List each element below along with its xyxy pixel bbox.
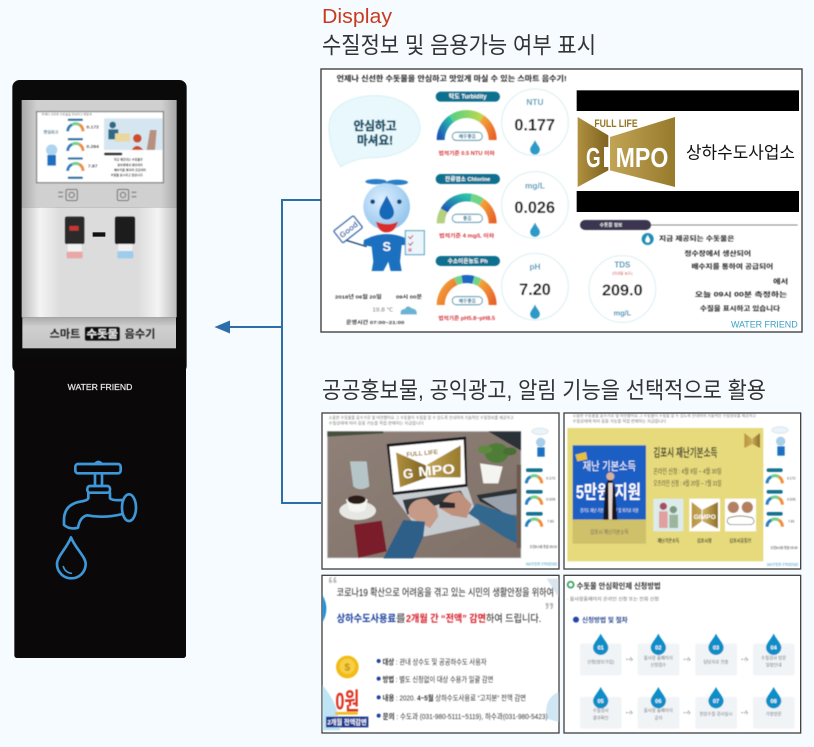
speech bubble (329, 96, 420, 167)
zero won: 0원 (335, 688, 359, 715)
tile: family (653, 499, 683, 531)
tile labels: 김포시유튜브 (729, 537, 752, 544)
step 06: 06 (655, 699, 661, 705)
section title (573, 615, 628, 624)
heading: Display: Display (322, 6, 392, 28)
notice headline: 를 (396, 613, 406, 625)
step 06: 물사랑 홈페이지 (644, 707, 673, 714)
tile: logo (689, 499, 720, 531)
water info: 오늘 09시 00분 측정하는 (695, 290, 787, 299)
TDS value: TDS (614, 261, 631, 270)
dispenser lower cabinet (14, 358, 186, 658)
redaction band top (577, 90, 799, 111)
chlorine indicator: 잔류염소 Chlorine (445, 175, 490, 183)
tile labels: 재난기본소득 (657, 537, 680, 544)
video poster: 재난 기본소득 (583, 460, 636, 473)
tile labels: 김포시청 (697, 537, 712, 544)
TDS value: 209.0 (602, 283, 643, 300)
panel: main display (321, 69, 802, 332)
speech bubble: 마셔요! (357, 133, 393, 147)
caption lines: 소중한 수돗물을 음수기로 옆 마련했어요 그 수돗물이 수질을 알 수 있도록 안내하여 기술적인 수질정보를 제공하고 (573, 412, 756, 418)
step 01: 신청(정보가입) (587, 658, 615, 665)
turbidity indicator: 탁도 Turbidity (449, 93, 487, 101)
date and time: 운영시간 07:00~21:00 (346, 319, 405, 326)
water info: 에서 (773, 276, 788, 285)
chlorine value: 0.026 (514, 198, 555, 217)
NTU value: NTU (526, 97, 544, 107)
tap divider (93, 232, 105, 237)
laptop photo (327, 431, 521, 558)
step 02: 물사랑 홈페이지 (644, 654, 673, 661)
intro line: · 물사랑홈페이지 온라인 신청 또는 전화 신청 (567, 596, 659, 603)
heading: selective use: 공공홍보물, 공익광고, 알림 기능을 선택적으로 활용 (322, 377, 766, 403)
label bar (22, 317, 176, 348)
step 04: 04 (771, 646, 778, 652)
step 08 (753, 687, 795, 729)
panel: water fee reduction notice (322, 572, 559, 733)
NTU value (502, 89, 568, 156)
mascot: Good (338, 220, 360, 240)
silver screen panel (22, 100, 177, 207)
notice headline: 코로나19 확산으로 어려움을 겪고 있는 시민의 생활안정을 위하여 (337, 586, 554, 599)
touch screen: 지금 제공되는 수돗물은 (114, 157, 143, 162)
step 05: 결과확인 (593, 714, 609, 721)
sidebar: 7.81 (547, 520, 554, 524)
panel: promotional laptop screen: 수질상태에 따라 음용 가능을 직접 판매하는 지금합니다 (329, 420, 424, 426)
dispensing bay (22, 207, 177, 317)
hot water tap (65, 217, 84, 258)
step 05: 수질검사 (593, 707, 609, 714)
notice headline: 상하수도사용료 (337, 612, 396, 625)
detail list: 문의 : 수도과 (031-980-5111~5119), 하수과(031-980-5423) (383, 711, 548, 721)
notice headline: “ (327, 572, 338, 596)
step 05 (580, 687, 622, 729)
detail list: 방법 : 별도 신청없이 대상 수용가 일괄 감면 (383, 674, 493, 684)
step 06 (638, 687, 679, 729)
label text (50, 326, 155, 341)
panel: promotional laptop screen (322, 413, 559, 569)
video poster: 5만원 지원 (576, 482, 641, 503)
touch screen: 7.87 (88, 163, 98, 169)
speech bubble: 안심하고 (354, 120, 397, 133)
turbidity indicator (436, 92, 500, 157)
turbidity indicator: 매우좋음 (459, 133, 477, 140)
water info: 지금 제공되는 수돗물은 (659, 234, 735, 243)
right half of display (577, 90, 799, 330)
icon: cloud (401, 306, 417, 314)
sidebar (526, 428, 558, 568)
water info: 배수지를 통하여 공급되어 (691, 261, 773, 270)
two month badge (326, 717, 368, 727)
pH value: pH (529, 262, 541, 272)
label text: 스마트 (50, 327, 80, 340)
touch screen: 언제나 신선한 수돗물을 안심하고 맛있게 (42, 112, 92, 116)
video poster: 경기도 재난 기본소득 10만 및 위기로 지원 (580, 507, 639, 514)
label text: 수돗물 (87, 328, 118, 340)
touch screen: 수질을 표시하고 있습니다 (111, 172, 143, 177)
GIMPO logo: G (586, 142, 601, 173)
step 01 (580, 634, 622, 675)
laptop photo: FULL LIFE (406, 449, 438, 459)
step 02: 02 (655, 646, 661, 652)
brand mark: WATER FRIEND (731, 320, 798, 330)
two month badge: 2개월 전액감면 (327, 717, 367, 726)
notice headline (327, 572, 555, 625)
pH indicator: 법적기준 pH5.8~pH8.5 (438, 314, 495, 322)
panel: water quality check procedure (564, 575, 801, 733)
chlorine indicator (436, 174, 500, 239)
chlorine value: mg/L (525, 180, 545, 190)
date and time: 09시 00분 (396, 293, 422, 300)
TDS value (589, 256, 656, 322)
caption lines: 소중한 수돗물을 음수기로 옆 마련했어요 그 수돗물이 수질을 알 수 있도록 안내하여 기술적인 수질정보를 제공하고 (329, 414, 514, 420)
water info (580, 220, 798, 313)
pH indicator: 수소이온농도 Ph (448, 257, 488, 265)
icon: gold coin (336, 656, 359, 678)
notice text: 김포시 재난기본소득 (653, 445, 717, 459)
touch screen (37, 112, 163, 183)
notice text: 온라인 신청 : 4월 9일 ~ 4월 30일 (653, 467, 722, 476)
redaction band bottom (577, 191, 799, 212)
GIMPO logo: MPO (616, 142, 668, 173)
label text: 음수기 (125, 326, 155, 340)
sidebar: 7.81 (788, 520, 795, 524)
step 01: 01 (598, 646, 604, 652)
touch screen: 안심하고 (44, 128, 59, 134)
mascot (334, 179, 424, 271)
dispenser upper body (12, 80, 187, 373)
org name: 상하수도사업소 (686, 142, 795, 162)
chlorine indicator: 좋음 (463, 216, 472, 222)
notice text (653, 445, 722, 487)
step 07 (695, 687, 737, 729)
GIMPO logo: FULL LIFE (594, 118, 638, 130)
pH value (502, 253, 568, 320)
small logo (744, 433, 760, 448)
yellow notice board (567, 428, 763, 561)
step 04: 일정안내 (766, 661, 782, 668)
chlorine value (502, 172, 568, 238)
chlorine indicator: 법적기준 4 mg/L 이하 (439, 231, 494, 239)
touch screen: 배수지를 통하여 공급되어 (114, 167, 146, 172)
step 04: 수질검사 방문 (761, 654, 786, 661)
sidebar: 0.026 (546, 498, 555, 502)
sidebar (767, 427, 799, 568)
display headline: 언제나 신선한 수돗물을 안심하고 맛있게 마실 수 있는 스마트 음수기! (337, 74, 567, 83)
panel: disaster basic income notice (564, 412, 801, 569)
notice headline: 하여 드립니다. (486, 612, 541, 625)
video poster: 김포시 재난기본소득 (590, 528, 628, 536)
decorative blue corners (323, 595, 326, 622)
tile: mascots (725, 499, 756, 531)
icon: gold coin: $ (345, 662, 351, 673)
brand text: WATER FRIEND (68, 382, 132, 392)
step 08: 08 (771, 699, 777, 705)
touch screen: 0.172 (86, 125, 99, 131)
laptop photo: G (402, 466, 414, 482)
screen buttons (58, 189, 136, 201)
pH indicator: 매우좋음 (459, 297, 477, 304)
water info: 수질을 표시하고 있습니다 (700, 304, 780, 313)
step 03: 03 (713, 646, 719, 652)
sidebar: 오전8시에 측정 05:00 (770, 545, 798, 550)
step 08: 가정방문 (766, 711, 782, 718)
section title: 신청방법 및 절차 (582, 615, 628, 624)
tile labels (657, 537, 752, 544)
step 02 (638, 634, 679, 675)
sidebar: 0.172 (787, 476, 796, 480)
step 03: 담당자로 전송 (703, 658, 729, 665)
water dispenser (12, 80, 187, 658)
notice headline: ” (544, 598, 555, 622)
procedure title: 수돗물 안심확인제 신청방법 (577, 581, 661, 590)
turbidity indicator: 법적기준 0.5 NTU 이하 (439, 149, 495, 157)
step 02: 신청접수 (650, 661, 666, 668)
notice text: 오프라인 신청 : 4월 20일 ~ 7월 31일 (653, 478, 722, 487)
water info: 정수장에서 생산되어 (684, 248, 751, 257)
mascot: S (382, 240, 391, 254)
tile: logo: GIMPO (694, 514, 716, 521)
notice headline: 2개월 간 “전액” 감면 (406, 612, 486, 625)
NTU value: 0.177 (514, 116, 555, 135)
step 07: 07 (713, 699, 719, 705)
connector arrow (217, 200, 321, 503)
cold water tap (115, 217, 135, 258)
GIMPO logo (578, 117, 675, 187)
TDS value: mg/L (614, 309, 632, 318)
pH indicator (436, 256, 500, 322)
sidebar: WATER FRIEND (526, 562, 558, 568)
heading: water quality display: 수질정보 및 음용가능 여부 표시 (322, 32, 596, 58)
touch screen: 정수장에서 생산되어 (117, 162, 143, 167)
left half of display (329, 74, 568, 326)
water info: 수돗물 정보 (600, 222, 623, 229)
step 06: 공지 (654, 714, 662, 721)
step 03 (695, 634, 737, 675)
laptop photo: MPO (418, 461, 455, 479)
panel: disaster basic income notice: 수질상태에 따라 음용 가능을 직접 판매하는 지금합니다 (573, 418, 666, 424)
sidebar: 0.026 (787, 498, 796, 502)
sidebar: 오전8시에 측정 05:00 (530, 544, 557, 549)
date and time (335, 293, 422, 326)
step 07: 현장수질 검사실시 (699, 711, 733, 718)
icon: faucet and drop (57, 462, 136, 578)
TDS value: (미네랄 농도) (612, 271, 632, 276)
detail list: 대상 : 관내 상수도 및 공공하수도 사용자 (383, 656, 487, 666)
date and time: 19.8 ℃ (372, 307, 394, 314)
touch screen: 0.264 (86, 144, 99, 150)
step 04 (753, 634, 795, 675)
video poster (573, 445, 646, 544)
step arrows (626, 657, 748, 715)
pH value: 7.20 (519, 280, 551, 299)
sidebar: WATER FRIEND (767, 562, 799, 568)
detail list: 내용 : 2020. 4~5월 상하수도사용료 “고지분” 전액 감면 (383, 693, 526, 703)
sidebar: 0.172 (546, 476, 555, 480)
step 05: 05 (598, 699, 604, 705)
date and time: 2018년 06월 20일 (335, 293, 382, 300)
detail list (377, 656, 548, 721)
